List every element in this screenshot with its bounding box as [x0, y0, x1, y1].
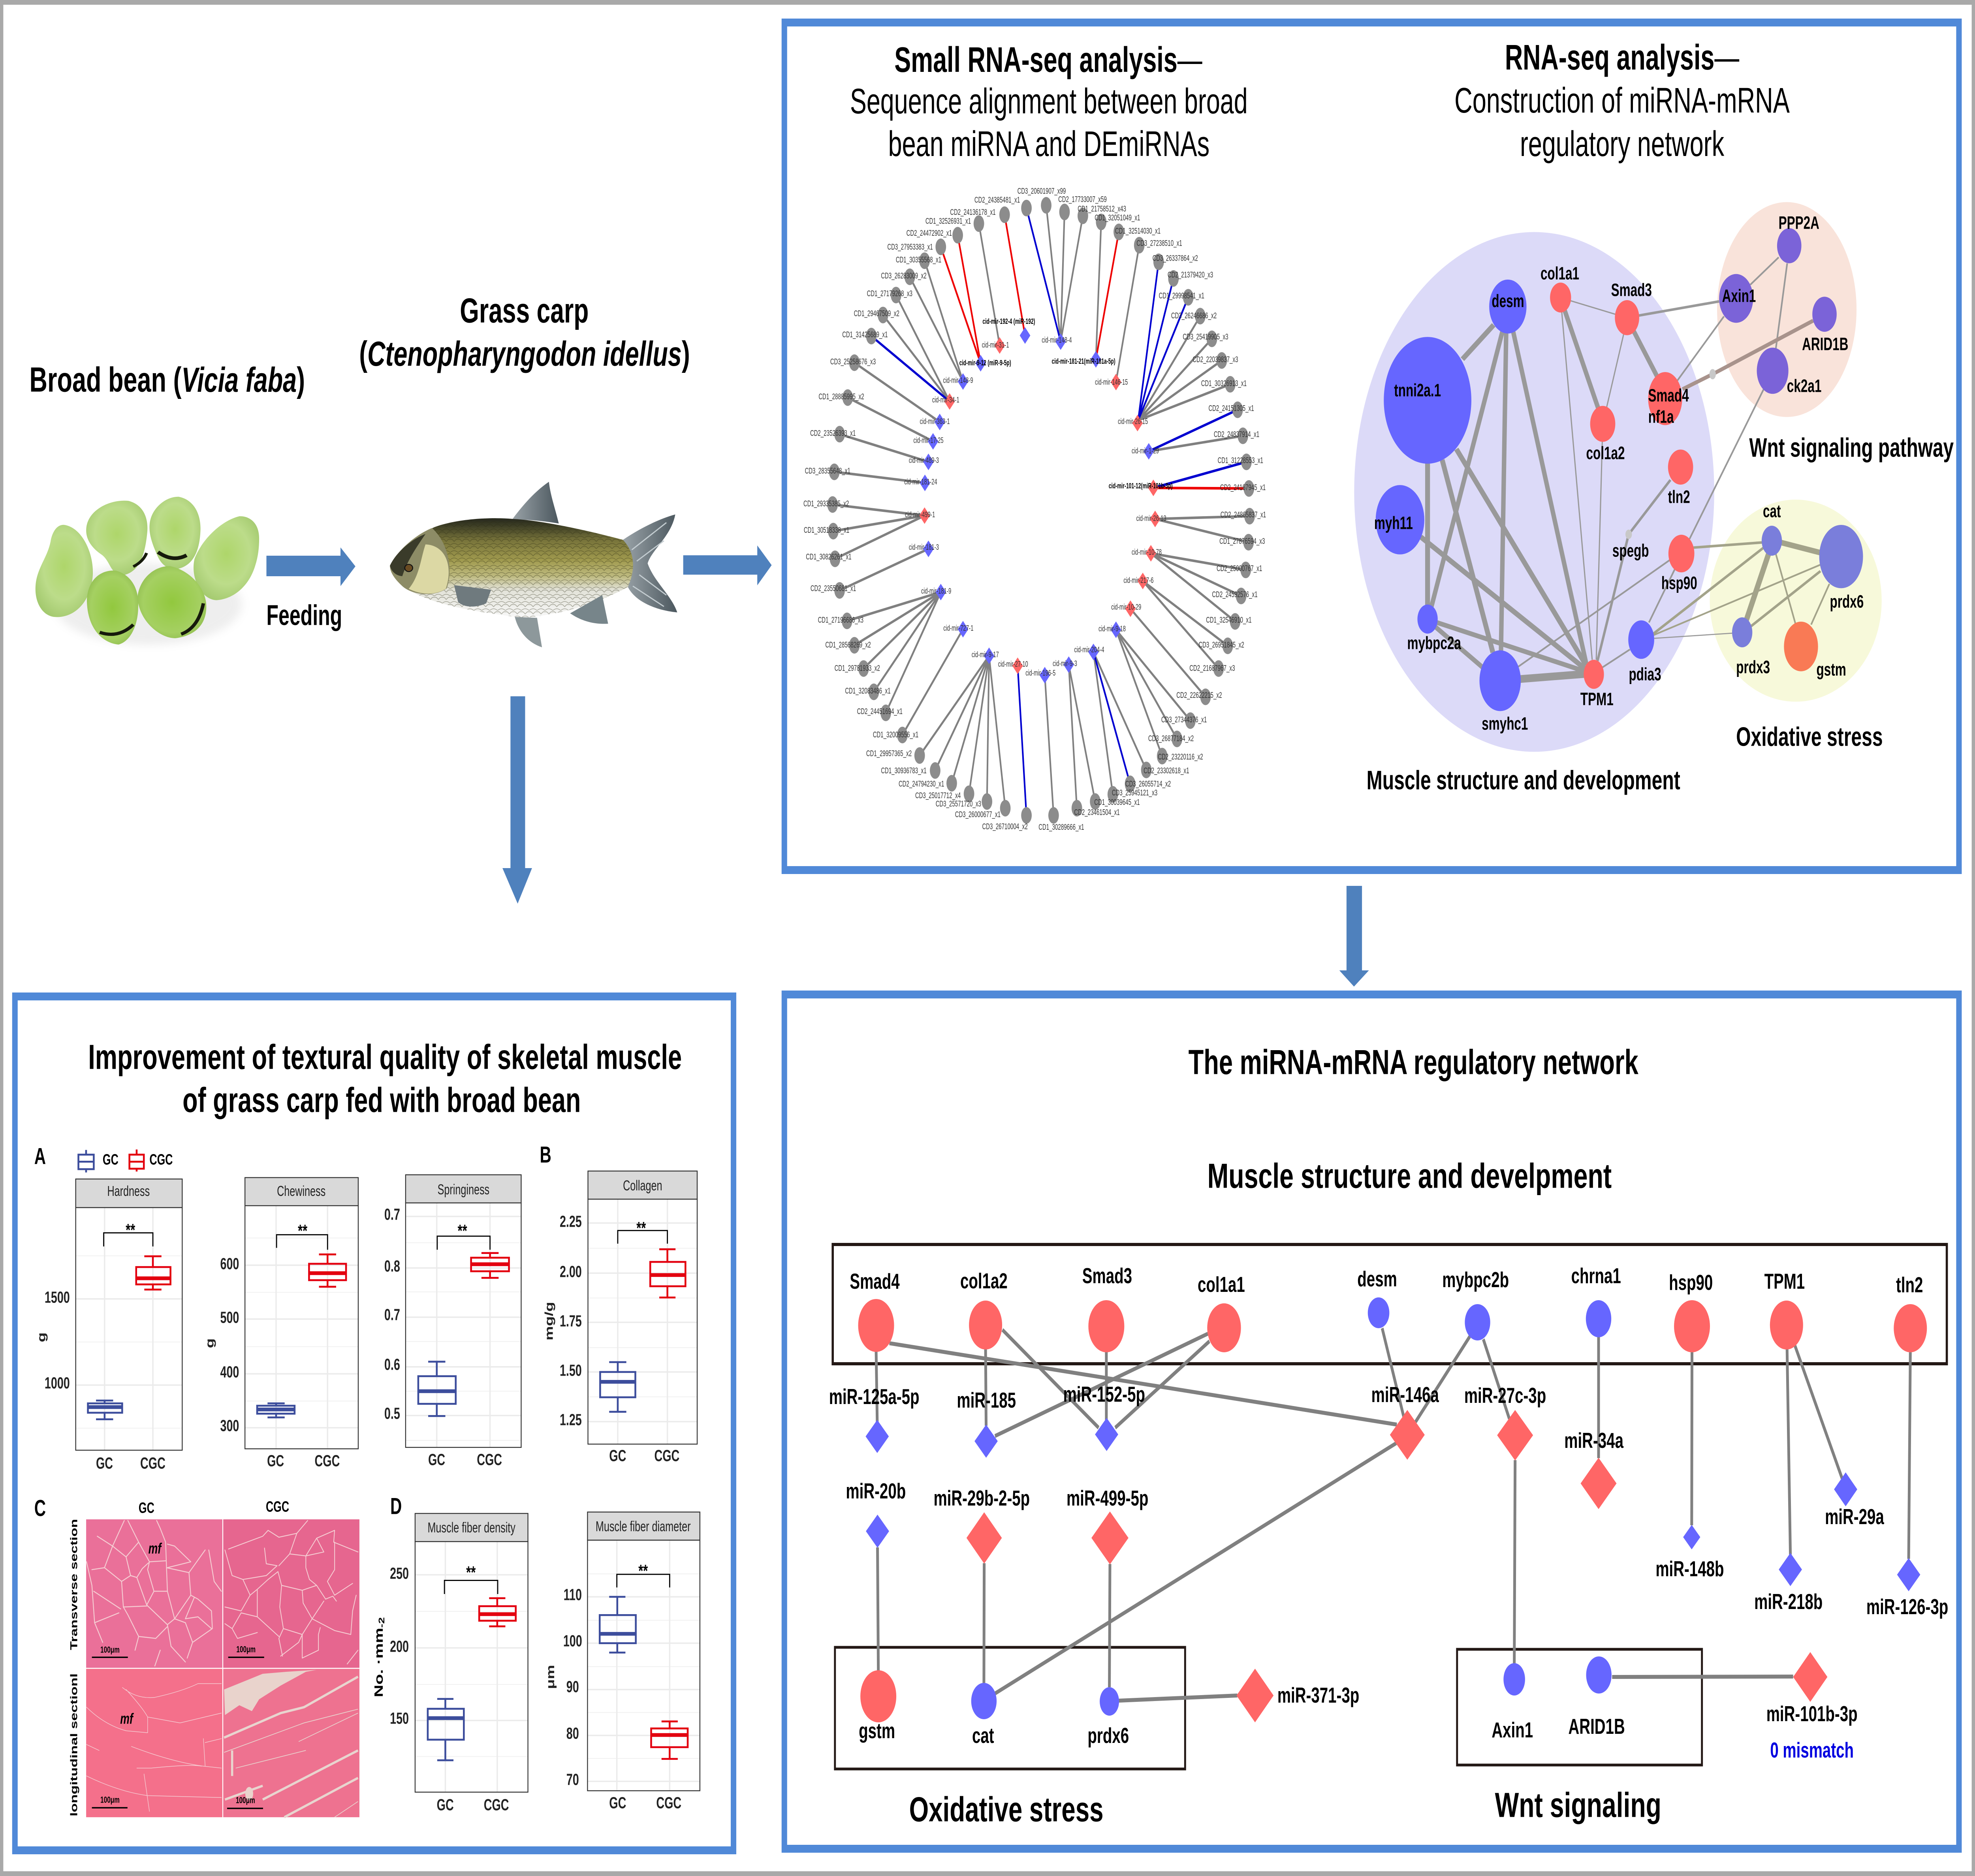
node labels: Smad3: [1611, 280, 1652, 300]
chart: muscle fiber density: GC: [437, 1796, 454, 1814]
chart: springiness: CGC: [477, 1451, 502, 1469]
network labels: miR-126-3p: [1866, 1595, 1948, 1619]
chart: circular alignment network: cid-mir-27-10: [998, 660, 1028, 669]
network labels: miR-371-3p: [1277, 1683, 1359, 1708]
chart: muscle fiber density: 200: [390, 1637, 409, 1656]
chart: hardness: [35, 1179, 182, 1472]
panel: textural quality: [15, 996, 734, 1850]
chart: circular alignment network: cid-mir-148-4: [1042, 335, 1072, 344]
heading: grass carp: (Ctenopharyngodon idellus): [359, 335, 690, 373]
network labels: gstm: [859, 1719, 895, 1743]
chart: circular alignment network: CD1_32009556_x1: [873, 730, 918, 740]
chart: springiness: 0.8: [384, 1257, 400, 1275]
chart: springiness: [384, 1175, 521, 1469]
chart: circular alignment network: cid-mir-101-12(miR-101b-3p): [1109, 482, 1173, 490]
chart: circular alignment network: CD3_25258676_x3: [830, 357, 876, 367]
chart: collagen: CGC: [654, 1447, 679, 1465]
caption: oxidative stress: Oxidative stress: [909, 1790, 1104, 1829]
note: 0 mismatch: 0 mismatch: [1770, 1738, 1854, 1763]
heading: broad bean: Broad bean (Vicia faba): [30, 361, 305, 399]
chart: chewiness: [203, 1178, 358, 1470]
chart: circular alignment network: CD1_32526931_x1: [925, 216, 971, 226]
chart: circular alignment network: CD2_17733007_x59: [1058, 194, 1107, 205]
chart: muscle fiber density: [372, 1513, 528, 1814]
chart: circular alignment network: cid-mir-363-1: [920, 417, 950, 426]
cluster label: Muscle structure and development: Muscle structure and development: [1367, 765, 1680, 795]
network labels: hsp90: [1669, 1271, 1713, 1295]
chart: circular alignment network: CD3_26000677_x1: [955, 810, 1001, 820]
arrow: fish to sequencing panel: [683, 545, 772, 585]
chart: hardness: Hardness: [107, 1183, 150, 1199]
node labels: nf1a: [1648, 407, 1674, 427]
chart: circular alignment network: cid-mir-26-13: [1136, 514, 1166, 523]
chart: circular alignment network: CD1_30289666_x1: [1038, 822, 1084, 832]
chart: circular alignment network: CD2_21379420_x3: [1168, 270, 1213, 280]
chart: circular alignment network: cid-mir-181-21(miR-181a-5p): [1052, 357, 1115, 366]
histology micrographs: [68, 1498, 359, 1817]
network labels: [829, 1264, 1948, 1748]
chart: collagen: **: [636, 1219, 646, 1238]
network labels: col1a2: [960, 1269, 1008, 1293]
node labels: PPP2A: [1779, 213, 1819, 233]
chart: circular alignment network: CD1_30355568_x1: [896, 255, 941, 265]
chart: circular alignment network: [803, 186, 1266, 832]
chart: circular alignment network: CD3_26877184_x2: [1148, 734, 1194, 744]
chart: chewiness: Chewiness: [277, 1183, 325, 1199]
node labels: ARID1B: [1802, 335, 1848, 354]
chart: circular alignment network: cid-mir-181-24: [904, 477, 937, 486]
heading: small RNA-seq analysis: bean miRNA and DEmiRNAs: [888, 124, 1209, 164]
chart: circular alignment network: CD2_24167945_x1: [1220, 483, 1266, 492]
network labels: miR-29a: [1825, 1505, 1884, 1529]
node labels: smyhc1: [1482, 714, 1528, 734]
node labels: mybpc2a: [1407, 633, 1461, 653]
regulatory edges: [876, 1328, 1910, 1701]
network labels: cat: [972, 1724, 994, 1748]
panel letters: A: [34, 1144, 46, 1169]
node labels: tnni2a.1: [1394, 381, 1441, 400]
chart: circular alignment network: CD1_30326913_x1: [1201, 378, 1247, 388]
chart: collagen: GC: [609, 1447, 626, 1465]
chart: circular alignment network: cid-mir-204-4: [1074, 645, 1104, 654]
chart: circular alignment network: CD2_24837914_x1: [1214, 429, 1259, 439]
node labels: col1a2: [1586, 444, 1625, 463]
chart: circular alignment network: cid-mir-10-29: [1111, 603, 1141, 611]
panel letters: [34, 1142, 551, 1521]
node labels: col1a1: [1540, 264, 1579, 284]
chart: circular alignment network: CD1_29781933_x2: [835, 663, 880, 673]
chart: circular alignment network: CD3_26951845_x2: [1198, 640, 1244, 650]
section headers: Transverse section: [68, 1519, 79, 1650]
heading: grass carp: Grass carp: [460, 291, 589, 330]
network shapes: [1354, 202, 1882, 752]
cluster label: Wnt signaling pathway: Wnt signaling pathway: [1749, 433, 1954, 463]
network labels: miR-27c-3p: [1464, 1384, 1546, 1408]
node labels: gstm: [1817, 660, 1846, 680]
chart: circular alignment network: CD2_23526393_x1: [810, 429, 856, 438]
panel: sequencing analyses: [784, 23, 1959, 870]
chart: circular alignment network: CD2_24136178_x1: [950, 207, 996, 217]
chart: circular alignment network: CD2_22039837_x3: [1193, 355, 1238, 365]
chart: circular alignment network: cid-mir-31-1: [982, 340, 1009, 350]
chart: circular alignment network: CD3_27344376_x1: [1161, 715, 1207, 725]
heading: small RNA-seq analysis: [850, 40, 1248, 164]
arrow: beans to fish: [267, 547, 356, 586]
chart: circular alignment network: cid-mir-196-5: [1025, 669, 1055, 677]
node labels: prdx6: [1830, 592, 1864, 612]
network labels: TPM1: [1764, 1269, 1805, 1294]
network labels: mybpc2b: [1442, 1268, 1509, 1292]
chart: circular alignment network: CD3_25419905_x3: [1183, 332, 1228, 342]
chart: circular alignment network: cid-mir-181-3: [909, 543, 939, 552]
chart: circular alignment network: cid-mir-17-25: [913, 436, 944, 445]
node labels: spegb: [1612, 541, 1649, 561]
chart: muscle fiber diameter: 80: [566, 1724, 579, 1743]
chart: springiness: 0.6: [384, 1355, 400, 1374]
image: grass carp: [390, 482, 677, 647]
chart: muscle fiber density: CGC: [484, 1796, 509, 1814]
chart: springiness: 0.5: [384, 1404, 400, 1423]
chart: circular alignment network: CD2_24865837_x1: [1221, 510, 1266, 520]
network labels: miR-148b: [1655, 1557, 1724, 1581]
network labels: Axin1: [1492, 1718, 1533, 1743]
chart: collagen: 2.25: [560, 1212, 582, 1231]
network labels: Smad4: [850, 1269, 900, 1294]
chart: collagen: [543, 1171, 697, 1465]
section headers: [68, 1498, 289, 1816]
chart: circular alignment network: CD1_32546910_x1: [1206, 615, 1252, 625]
chart: circular alignment network: CD1_28885995_x2: [818, 392, 864, 402]
chart: muscle fiber diameter: **: [638, 1562, 648, 1581]
chart: circular alignment network: CD3_27953383_x1: [887, 242, 933, 252]
chart: circular alignment network: CD2_24385481_x1: [974, 195, 1020, 205]
chart: collagen: Collagen: [623, 1178, 662, 1194]
chart: gene interaction network: [1354, 202, 1954, 795]
chart: circular alignment network: CD1_30936783_x1: [881, 766, 927, 776]
chart: collagen: 2.00: [560, 1263, 582, 1281]
chart: circular alignment network: cid-mir-9-3: [1053, 659, 1077, 668]
network labels: miR-218b: [1754, 1590, 1823, 1614]
chart: circular alignment network: CD1_29467509_x2: [854, 308, 899, 319]
micrograph annotations: 100μm: [236, 1796, 255, 1805]
chart: circular alignment network: CD2_23220116_x2: [1158, 752, 1203, 762]
network labels: chrna1: [1571, 1264, 1621, 1288]
chart: circular alignment network: CD2_23550681_x1: [811, 583, 856, 593]
network labels: miR-101b-3p: [1766, 1702, 1858, 1726]
panel frame: [784, 23, 1959, 870]
chart: circular alignment network: CD1_30826261_x1: [806, 552, 852, 562]
chart: hardness: 1000: [45, 1374, 70, 1392]
arrow: sequencing panel to regulatory network: [1339, 886, 1369, 987]
node labels: hsp90: [1661, 573, 1697, 593]
network labels: desm: [1357, 1267, 1397, 1291]
chart: circular alignment network: CD2_24151305_x1: [1208, 403, 1254, 413]
chart: hardness: CGC: [140, 1454, 166, 1472]
chart: circular alignment network: CD1_29998541_x1: [1159, 291, 1204, 301]
chart: muscle fiber diameter: 90: [566, 1678, 579, 1696]
heading: RNA-seq analysis: [1454, 38, 1790, 164]
chart: circular alignment network: CD1_30518338_x1: [804, 525, 849, 535]
chart: muscle fiber diameter: 100: [563, 1632, 582, 1650]
legend: CGC: [149, 1151, 173, 1167]
network labels: col1a1: [1198, 1273, 1245, 1297]
micrograph images: [86, 1519, 359, 1817]
chart: circular alignment network: CD1_29957365_x2: [866, 748, 912, 759]
network labels: miR-146a: [1371, 1383, 1439, 1407]
heading: regulatory network: The miRNA-mRNA regulatory network: [1189, 1043, 1638, 1082]
micrograph annotations: mf: [149, 1540, 162, 1556]
chart: muscle fiber density: No. ·mm: [372, 1628, 386, 1697]
chart: circular alignment network: CD3_28355648_x1: [805, 466, 850, 476]
network labels: Smad3: [1082, 1264, 1132, 1288]
chart: springiness: GC: [428, 1451, 445, 1469]
chart: muscle fiber density: **: [466, 1563, 476, 1582]
heading: textural quality: [88, 1038, 682, 1120]
network labels: miR-152-5p: [1063, 1382, 1145, 1407]
chart: circular alignment network: cid-mir-9-12 (miR-9-5p): [959, 359, 1011, 367]
chart: circular alignment network: cid-mir-181-9: [921, 586, 951, 596]
chart: muscle fiber diameter: Muscle fiber diameter: [596, 1519, 690, 1534]
node labels: desm: [1492, 291, 1524, 311]
chart: circular alignment network: CD1_29335385_x2: [803, 499, 849, 509]
chart: chewiness: g: [203, 1338, 216, 1348]
chart: circular alignment network: CD2_24592576_x1: [1212, 590, 1258, 600]
chart: circular alignment network: cid-mir-192-4 (miR-192): [982, 318, 1035, 326]
network labels: ARID1B: [1569, 1714, 1625, 1739]
panel: miRNA-mRNA regulatory network: [784, 994, 1959, 1849]
chart: muscle fiber diameter: μm: [544, 1665, 557, 1689]
chart: circular alignment network: CD2_23302618_x1: [1144, 766, 1189, 776]
chart: circular alignment network: cid-mir-489-3: [909, 456, 939, 465]
node labels: pdia3: [1629, 665, 1661, 684]
chart: circular alignment network: CD1_32051049_x1: [1095, 213, 1140, 223]
heading: small RNA-seq analysis: Small RNA-seq analysis—: [894, 40, 1202, 80]
node labels: [1374, 213, 1864, 734]
box: muscle genes: [833, 1244, 1947, 1364]
chart: springiness: 0.7: [384, 1205, 400, 1224]
chart: circular alignment network: cid-mir-217-6: [1123, 576, 1153, 585]
chart: circular alignment network: cid-mir-9-17: [972, 650, 999, 659]
chart: circular alignment network: CD2_22622215_x2: [1176, 690, 1222, 700]
chart: circular alignment network: CD2_25000767_x1: [1217, 564, 1262, 573]
chart: chewiness: 500: [220, 1308, 239, 1327]
section headers: GC: [139, 1499, 154, 1516]
micrograph annotations: 100μm: [236, 1645, 256, 1654]
image: broad beans: [36, 497, 259, 645]
heading: RNA-seq analysis: RNA-seq analysis—: [1505, 38, 1739, 77]
section headers: longitudinal sectionl: [68, 1673, 79, 1816]
node labels: ck2a1: [1787, 376, 1821, 396]
network labels: miR-29b-2-5p: [933, 1486, 1030, 1511]
chart: circular alignment network: CD3_25017712_x4: [915, 791, 961, 801]
chart: springiness: **: [458, 1222, 467, 1241]
chart: chewiness: CGC: [315, 1452, 340, 1470]
network labels: miR-125a-5p: [829, 1385, 920, 1409]
heading: textural quality: Improvement of textural quality of skeletal muscle: [88, 1038, 682, 1077]
chart: chewiness: **: [298, 1222, 307, 1241]
chart: circular alignment network: CD1_28568269_x2: [825, 640, 871, 650]
chart: muscle fiber diameter: 70: [566, 1771, 579, 1789]
heading: textural quality: of grass carp fed with broad bean: [182, 1081, 581, 1120]
chart: circular alignment network: CD1_32083486_x1: [845, 686, 891, 696]
chart: circular alignment network: cid-mir-1-29: [1132, 446, 1159, 455]
chart: muscle fiber diameter: CGC: [656, 1794, 681, 1812]
node labels: prdx3: [1736, 658, 1770, 677]
mRNA nodes: [858, 1297, 1927, 1722]
chart: circular alignment network: cid-mir-34-1: [932, 395, 959, 404]
chart: circular alignment network: CD3_26055714_x2: [1125, 779, 1171, 789]
chart: circular alignment network: cid-mir-10-78: [1132, 548, 1162, 556]
micrograph annotations: 100μm: [100, 1795, 120, 1805]
panel frame: [784, 994, 1959, 1849]
chart: circular alignment network: CD2_21687967_x3: [1189, 663, 1235, 673]
box: oxidative stress genes: [835, 1647, 1185, 1769]
chart: circular alignment network: CD3_26337864_x2: [1153, 253, 1198, 263]
chart: circular alignment network: CD3_25571720_x3: [936, 799, 981, 809]
cluster label: Oxidative stress: Oxidative stress: [1736, 722, 1883, 752]
chart: circular alignment network: CD3_26283009_x2: [881, 271, 927, 281]
chart: hardness: GC: [96, 1454, 113, 1472]
chart: circular alignment network: cid-mir-26-15: [1118, 417, 1148, 426]
heading: small RNA-seq analysis: Sequence alignment between broad: [850, 82, 1248, 121]
chart: circular alignment network: CD3_20601907_x99: [1018, 186, 1066, 196]
chart: springiness: 0.7: [384, 1306, 400, 1324]
panel letters: B: [540, 1142, 551, 1167]
chart: springiness: Springiness: [438, 1182, 489, 1197]
chart: collagen: mg/g: [543, 1302, 555, 1340]
panel letters: D: [390, 1494, 402, 1519]
chart: muscle fiber diameter: GC: [609, 1794, 626, 1812]
chart: circular alignment network: CD1_30039645_x1: [1094, 797, 1140, 807]
micrograph annotations: mf: [120, 1710, 134, 1727]
chart: circular alignment network: CD1_27179268_x3: [867, 289, 912, 299]
legend: GC: [103, 1151, 118, 1167]
chart: circular alignment network: CD1_31228553_x1: [1218, 455, 1263, 465]
chart: muscle fiber diameter: 110: [564, 1586, 582, 1604]
chart: hardness: **: [126, 1221, 135, 1240]
subheading: muscle structure: Muscle structure and develpment: [1208, 1157, 1612, 1196]
chart: muscle fiber diameter: [544, 1512, 700, 1812]
chart: circular alignment network: CD3_26710004_x2: [982, 822, 1028, 832]
chart: circular alignment network: CD1_32514030_x1: [1115, 226, 1161, 236]
network labels: prdx6: [1087, 1724, 1129, 1748]
chart: hardness: g: [35, 1332, 48, 1342]
arrow: fish to texture panel: [502, 696, 532, 904]
chart: hardness: 1500: [45, 1288, 70, 1306]
network labels: miR-185: [957, 1388, 1016, 1413]
chart: circular alignment network: cid-mir-499-1: [905, 510, 935, 519]
chart: collagen: 1.50: [560, 1361, 582, 1380]
node labels: TPM1: [1580, 690, 1614, 709]
node labels: tln2: [1668, 487, 1690, 507]
chart: chewiness: GC: [267, 1452, 284, 1470]
network labels: miR-34a: [1564, 1429, 1623, 1453]
chart: circular alignment network: CD3_26246686_x2: [1171, 311, 1217, 321]
node labels: cat: [1763, 502, 1781, 521]
chart: circular alignment network: CD2_24472902_x1: [907, 228, 952, 238]
chart: muscle fiber density: 250: [390, 1564, 409, 1583]
panel letters: C: [34, 1496, 46, 1521]
chart: circular alignment network: CD3_27238510_x1: [1136, 238, 1182, 248]
section headers: CGC: [266, 1498, 289, 1515]
node labels: Axin1: [1722, 286, 1756, 306]
legend: [79, 1149, 173, 1173]
heading: grass carp: [359, 291, 690, 373]
chart: circular alignment network: cid-mir-146-15: [1095, 378, 1128, 387]
network labels: miR-499-5p: [1066, 1486, 1148, 1511]
chart: collagen: 1.75: [560, 1312, 582, 1330]
micrograph annotations: 100μm: [100, 1645, 120, 1655]
chart: circular alignment network: cid-mir-727-1: [943, 624, 973, 633]
network labels: miR-20b: [846, 1479, 906, 1504]
node labels: myh11: [1374, 513, 1413, 533]
heading: RNA-seq analysis: regulatory network: [1520, 124, 1724, 164]
chart: circular alignment network: CD1_31425689_x1: [842, 330, 888, 340]
chart: chewiness: 600: [220, 1255, 239, 1273]
chart: muscle fiber density: 150: [390, 1709, 409, 1727]
miRNA nodes: [865, 1410, 1920, 1722]
chart: muscle fiber density: Muscle fiber density: [427, 1520, 515, 1536]
network labels: tln2: [1896, 1273, 1923, 1297]
chart: muscle fiber density: -2: [377, 1617, 386, 1628]
heading: RNA-seq analysis: Construction of miRNA-mRNA: [1454, 81, 1790, 120]
chart: circular alignment network: CD2_23461504_x1: [1074, 807, 1120, 817]
micrograph annotations: [100, 1540, 256, 1805]
caption: Wnt signaling: Wnt signaling: [1495, 1786, 1661, 1825]
chart: circular alignment network: cid-mir-9-18: [1098, 624, 1126, 633]
box: Wnt signaling genes: [1457, 1649, 1702, 1765]
chart: chewiness: 400: [220, 1363, 239, 1381]
label: feeding: Feeding: [267, 600, 342, 632]
chart: circular alignment network: CD2_24794230_x1: [899, 779, 944, 789]
panel frame: [15, 996, 734, 1850]
chart: circular alignment network: cid-mir-148-9: [943, 376, 973, 385]
chart: circular alignment network: CD1_27876594_x3: [1219, 536, 1265, 546]
chart: chewiness: 300: [220, 1417, 239, 1435]
chart: circular alignment network: CD2_24451694_x1: [857, 707, 903, 716]
node labels: Smad4: [1648, 386, 1689, 406]
chart: collagen: 1.25: [560, 1411, 582, 1429]
chart: circular alignment network: CD1_27196686_x3: [818, 615, 863, 625]
chart: circular alignment network: CD1_21758512_x43: [1078, 204, 1126, 214]
chart: circular alignment network: CD3_25945121_x3: [1112, 788, 1157, 798]
